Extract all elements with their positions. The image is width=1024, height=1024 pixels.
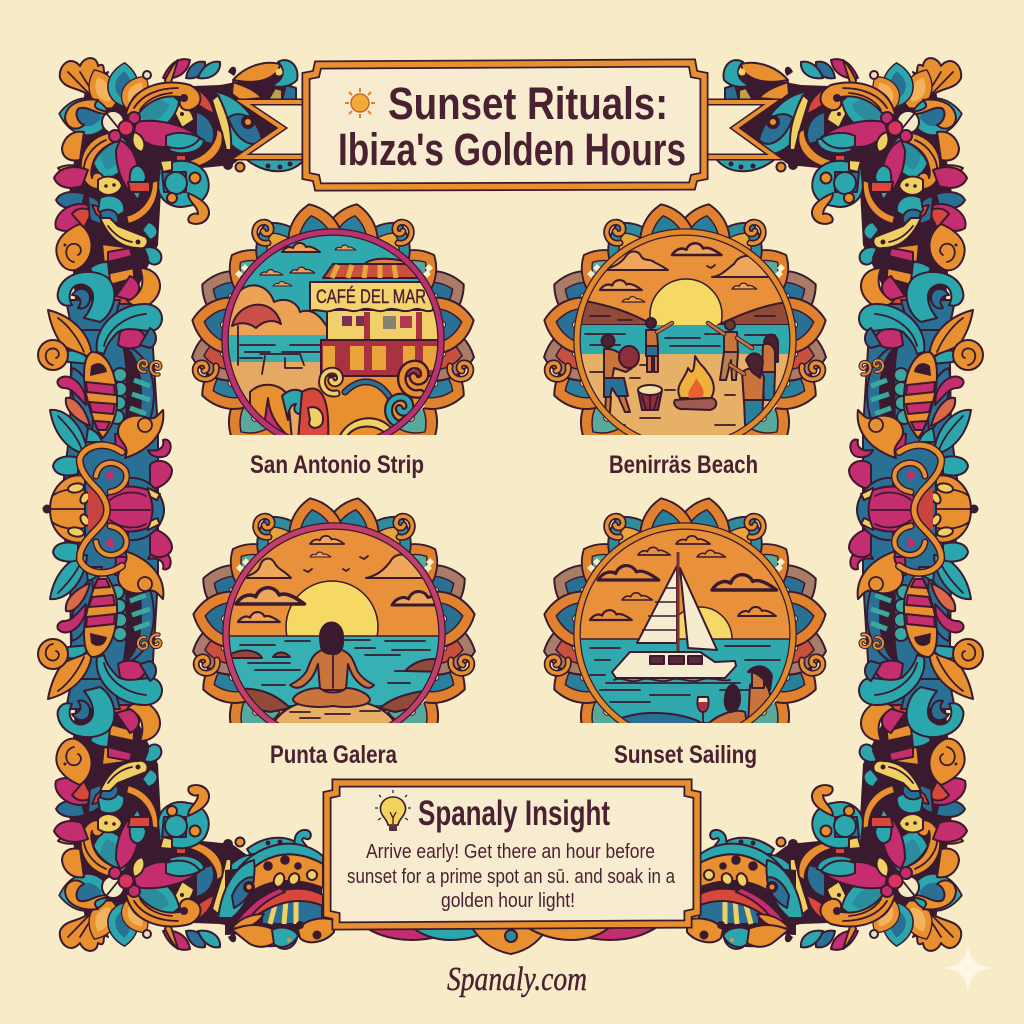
bonfire xyxy=(674,356,716,410)
insight heading: Spanaly Insight xyxy=(418,794,610,833)
cafe sign xyxy=(310,282,433,311)
figure: dancer right xyxy=(708,320,752,380)
petal medallion xyxy=(543,497,827,723)
title frame xyxy=(306,63,704,187)
side medallion: right xyxy=(849,445,978,573)
title line 1: Sunset Rituals: xyxy=(388,78,668,129)
scene: Cafe del Mar xyxy=(228,236,438,435)
panel: Punta Galera xyxy=(189,494,479,775)
figure: dancer centre xyxy=(646,318,672,372)
insight body: Arrive early! Get there an hour before xyxy=(366,841,655,863)
orange ring xyxy=(577,526,793,742)
footer brand: Spanaly.com xyxy=(447,961,587,998)
label: Sunset Sailing xyxy=(614,741,757,769)
insight panel xyxy=(327,783,697,954)
insight body: golden hour light! xyxy=(441,890,575,912)
figure: woman seated right xyxy=(747,665,773,718)
decorative swirls xyxy=(250,385,292,440)
cafe building xyxy=(327,310,439,342)
figure: woman with long hair xyxy=(708,684,747,723)
magenta ring xyxy=(225,232,441,448)
ribbon right xyxy=(702,102,775,157)
ornament beneath insight box xyxy=(362,925,660,954)
figure: left drummer xyxy=(602,334,639,412)
scene: sailing xyxy=(580,530,790,723)
insight body xyxy=(347,841,676,912)
label: Punta Galera xyxy=(270,741,398,769)
figure: meditator xyxy=(290,622,374,707)
title line 2: Ibiza's Golden Hours xyxy=(338,124,686,175)
cafe roof xyxy=(323,264,418,278)
petal medallion xyxy=(191,203,475,435)
border corner: bottom left xyxy=(38,499,304,951)
insight body: sunset for a prime spot an sū. and soak in a xyxy=(347,866,676,888)
magenta ring xyxy=(226,526,442,742)
panel: Sunset Sailing xyxy=(540,494,830,775)
petal medallion xyxy=(543,203,827,435)
orange ring xyxy=(577,232,793,448)
drum xyxy=(638,385,662,410)
ribbon left xyxy=(240,102,308,157)
figure: front woman xyxy=(730,353,764,425)
icon: lightbulb xyxy=(375,790,411,831)
panel: San Antonio Strip xyxy=(188,200,478,481)
border corner: bottom right xyxy=(717,499,983,951)
side medallion: left xyxy=(42,445,172,573)
petal medallion xyxy=(192,497,476,723)
scene: Cafe del Mar: CAFÉ DEL MAR xyxy=(316,287,426,308)
insight frame xyxy=(327,783,697,926)
bottom band: right xyxy=(687,830,803,947)
title banner xyxy=(240,63,775,187)
sailboat xyxy=(606,552,740,683)
icon: sun xyxy=(345,88,375,118)
icon: sparkle xyxy=(944,944,992,992)
scene: meditation xyxy=(230,530,438,723)
border corner: top left xyxy=(38,58,304,510)
bottom band: left xyxy=(218,830,334,947)
scene: beach drum circle xyxy=(580,236,790,435)
figure: back woman xyxy=(762,334,778,400)
label: San Antonio Strip xyxy=(250,451,424,479)
border corner: top right xyxy=(717,58,983,510)
wine glass xyxy=(697,697,709,723)
label: Benirräs Beach xyxy=(609,451,758,479)
panel: Benirras Beach xyxy=(540,200,830,481)
